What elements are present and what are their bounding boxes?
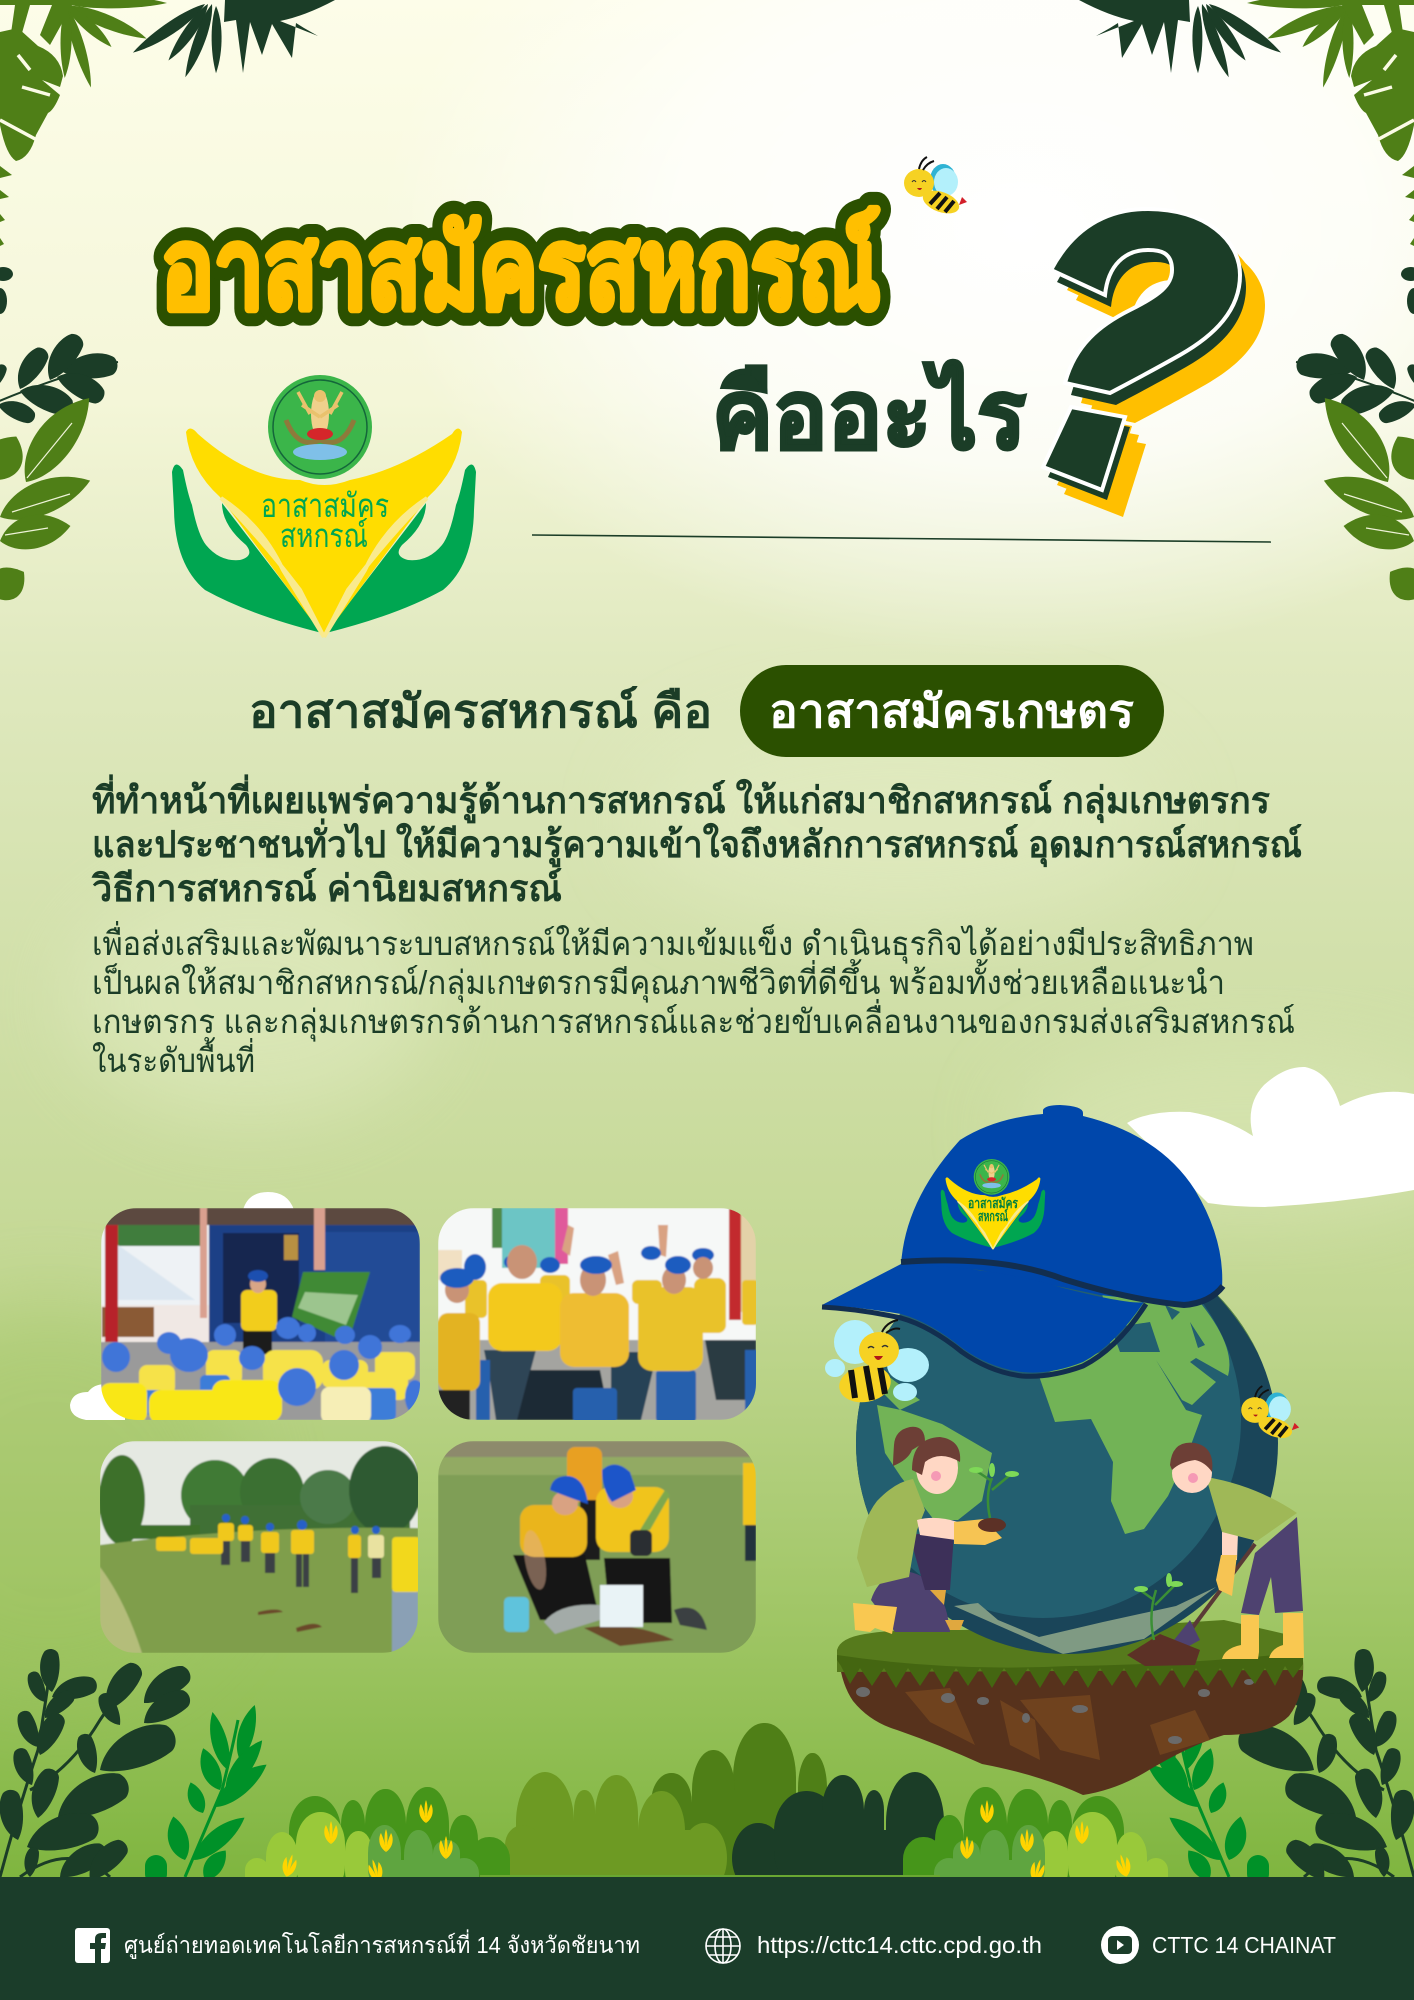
logo text line 2: สหกรณ์ (280, 517, 368, 554)
footer: youtube icon (1101, 1926, 1139, 1964)
photo: tree planting field (99, 1441, 421, 1653)
heading: definition: อาสาสมัครสหกรณ์ คือ (249, 685, 712, 737)
footer: web icon (706, 1929, 740, 1963)
logo: cooperative volunteers (172, 375, 476, 637)
icon: top bee (904, 157, 967, 218)
footer: youtube channel: CTTC 14 CHAINAT (1152, 1932, 1336, 1958)
photo: two people planting a sapling (438, 1441, 756, 1653)
icon: small bee right (1241, 1386, 1299, 1442)
cap logo (941, 1159, 1045, 1249)
subtitle: what is it: คืออะไร (712, 360, 1026, 469)
footer: facebook page name: ศูนย์ถ่ายทอดเทคโนโลยีการสหกรณ์ที่ 14 จังหวัดชัยนาท (124, 1929, 640, 1959)
badge: agricultural volunteers (740, 665, 1164, 757)
paragraph: role: วิธีการสหกรณ์ ค่านิยมสหกรณ์ (91, 868, 562, 909)
green fern right (1142, 1703, 1269, 1885)
badge: agricultural volunteers: อาสาสมัครเกษตร (769, 685, 1134, 737)
cap logo: สหกรณ์ (978, 1208, 1008, 1224)
globe (856, 1269, 1278, 1654)
top-right foliage (1079, 0, 1414, 608)
paragraph: purpose: เกษตรกร และกลุ่มเกษตรกรด้านการสหกรณ์และช่วยขับเคลื่อนงานของกรมส่งเสริมสหกรณ์ (92, 999, 1295, 1042)
dark fern left (0, 1649, 195, 1886)
icon: big bee (825, 1320, 929, 1406)
footer: facebook icon (75, 1928, 110, 1963)
divider line (532, 535, 1271, 542)
footer band (0, 1875, 1414, 2000)
icon: question mark (1043, 209, 1265, 517)
title: อาสาสมัครสหกรณ์ (161, 207, 880, 332)
paragraph: purpose: เพื่อส่งเสริมและพัฒนาระบบสหกรณ์ให้มีความเข้มแข็ง ดำเนินธุรกิจได้อย่างมีประสิทธิภาพ (92, 921, 1254, 964)
flowering bush right (903, 1787, 1168, 1898)
logo text line 1: อาสาสมัคร (261, 487, 389, 524)
flowering bush left (245, 1787, 510, 1898)
green fern left (145, 1703, 272, 1885)
dark fern right (1219, 1649, 1414, 1886)
title: อาสาสมัครสหกรณ์ (161, 207, 880, 332)
paragraph: purpose (92, 921, 1295, 1079)
paragraph: role: และประชาชนทั่วไป ให้มีความรู้ความเข้าใจถึงหลักการสหกรณ์ อุดมการณ์สหกรณ์ (92, 818, 1302, 868)
paragraph: purpose: เป็นผลให้สมาชิกสหกรณ์/กลุ่มเกษตรกรมีคุณภาพชีวิตที่ดีขึ้น พร้อมทั้งช่วยเหลือแนะนำ (92, 959, 1225, 1003)
footer: website url: https://cttc14.cttc.cpd.go.th (757, 1932, 1042, 1958)
paragraph: purpose: ในระดับพื้นที่ (92, 1037, 255, 1079)
photo: seated members raising hands (438, 1208, 758, 1422)
paragraph: role (91, 774, 1302, 909)
cap logo: อาสาสมัคร (968, 1195, 1018, 1211)
person: man digging with shovel (1127, 1443, 1304, 1666)
top-left foliage (0, 0, 335, 608)
paragraph: role: ที่ทำหน้าที่เผยแพร่ความรู้ด้านการสหกรณ์ ให้แก่สมาชิกสหกรณ์ กลุ่มเกษตรกร (92, 774, 1270, 824)
person: kneeling girl with seedling (853, 1427, 1019, 1634)
baseball cap (822, 1105, 1223, 1376)
left clouds (70, 1192, 294, 1420)
photo: speaker with audience (100, 1208, 425, 1424)
floating island (837, 1620, 1303, 1795)
right cloud (1127, 1067, 1414, 1207)
centre bushes (505, 1723, 944, 1895)
